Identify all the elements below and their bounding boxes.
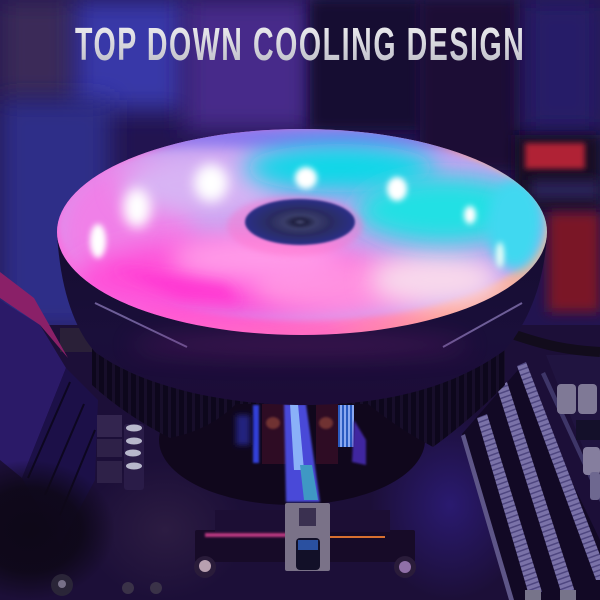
RAM slots (461, 362, 600, 600)
fin stack (92, 335, 505, 447)
title: TOP DOWN COOLING DESIGN (75, 19, 524, 71)
fan lit face (50, 125, 550, 335)
lower heatsink and heat pipes (159, 375, 425, 505)
LED lights (90, 164, 504, 268)
background room (0, 0, 600, 340)
fan shroud body (57, 232, 547, 405)
capacitors right (546, 355, 600, 500)
left heatsink block (0, 272, 115, 600)
cable (515, 335, 600, 352)
motherboard (0, 325, 600, 600)
mounting bracket (194, 503, 416, 578)
fan hub (227, 196, 363, 256)
left components (51, 415, 162, 596)
